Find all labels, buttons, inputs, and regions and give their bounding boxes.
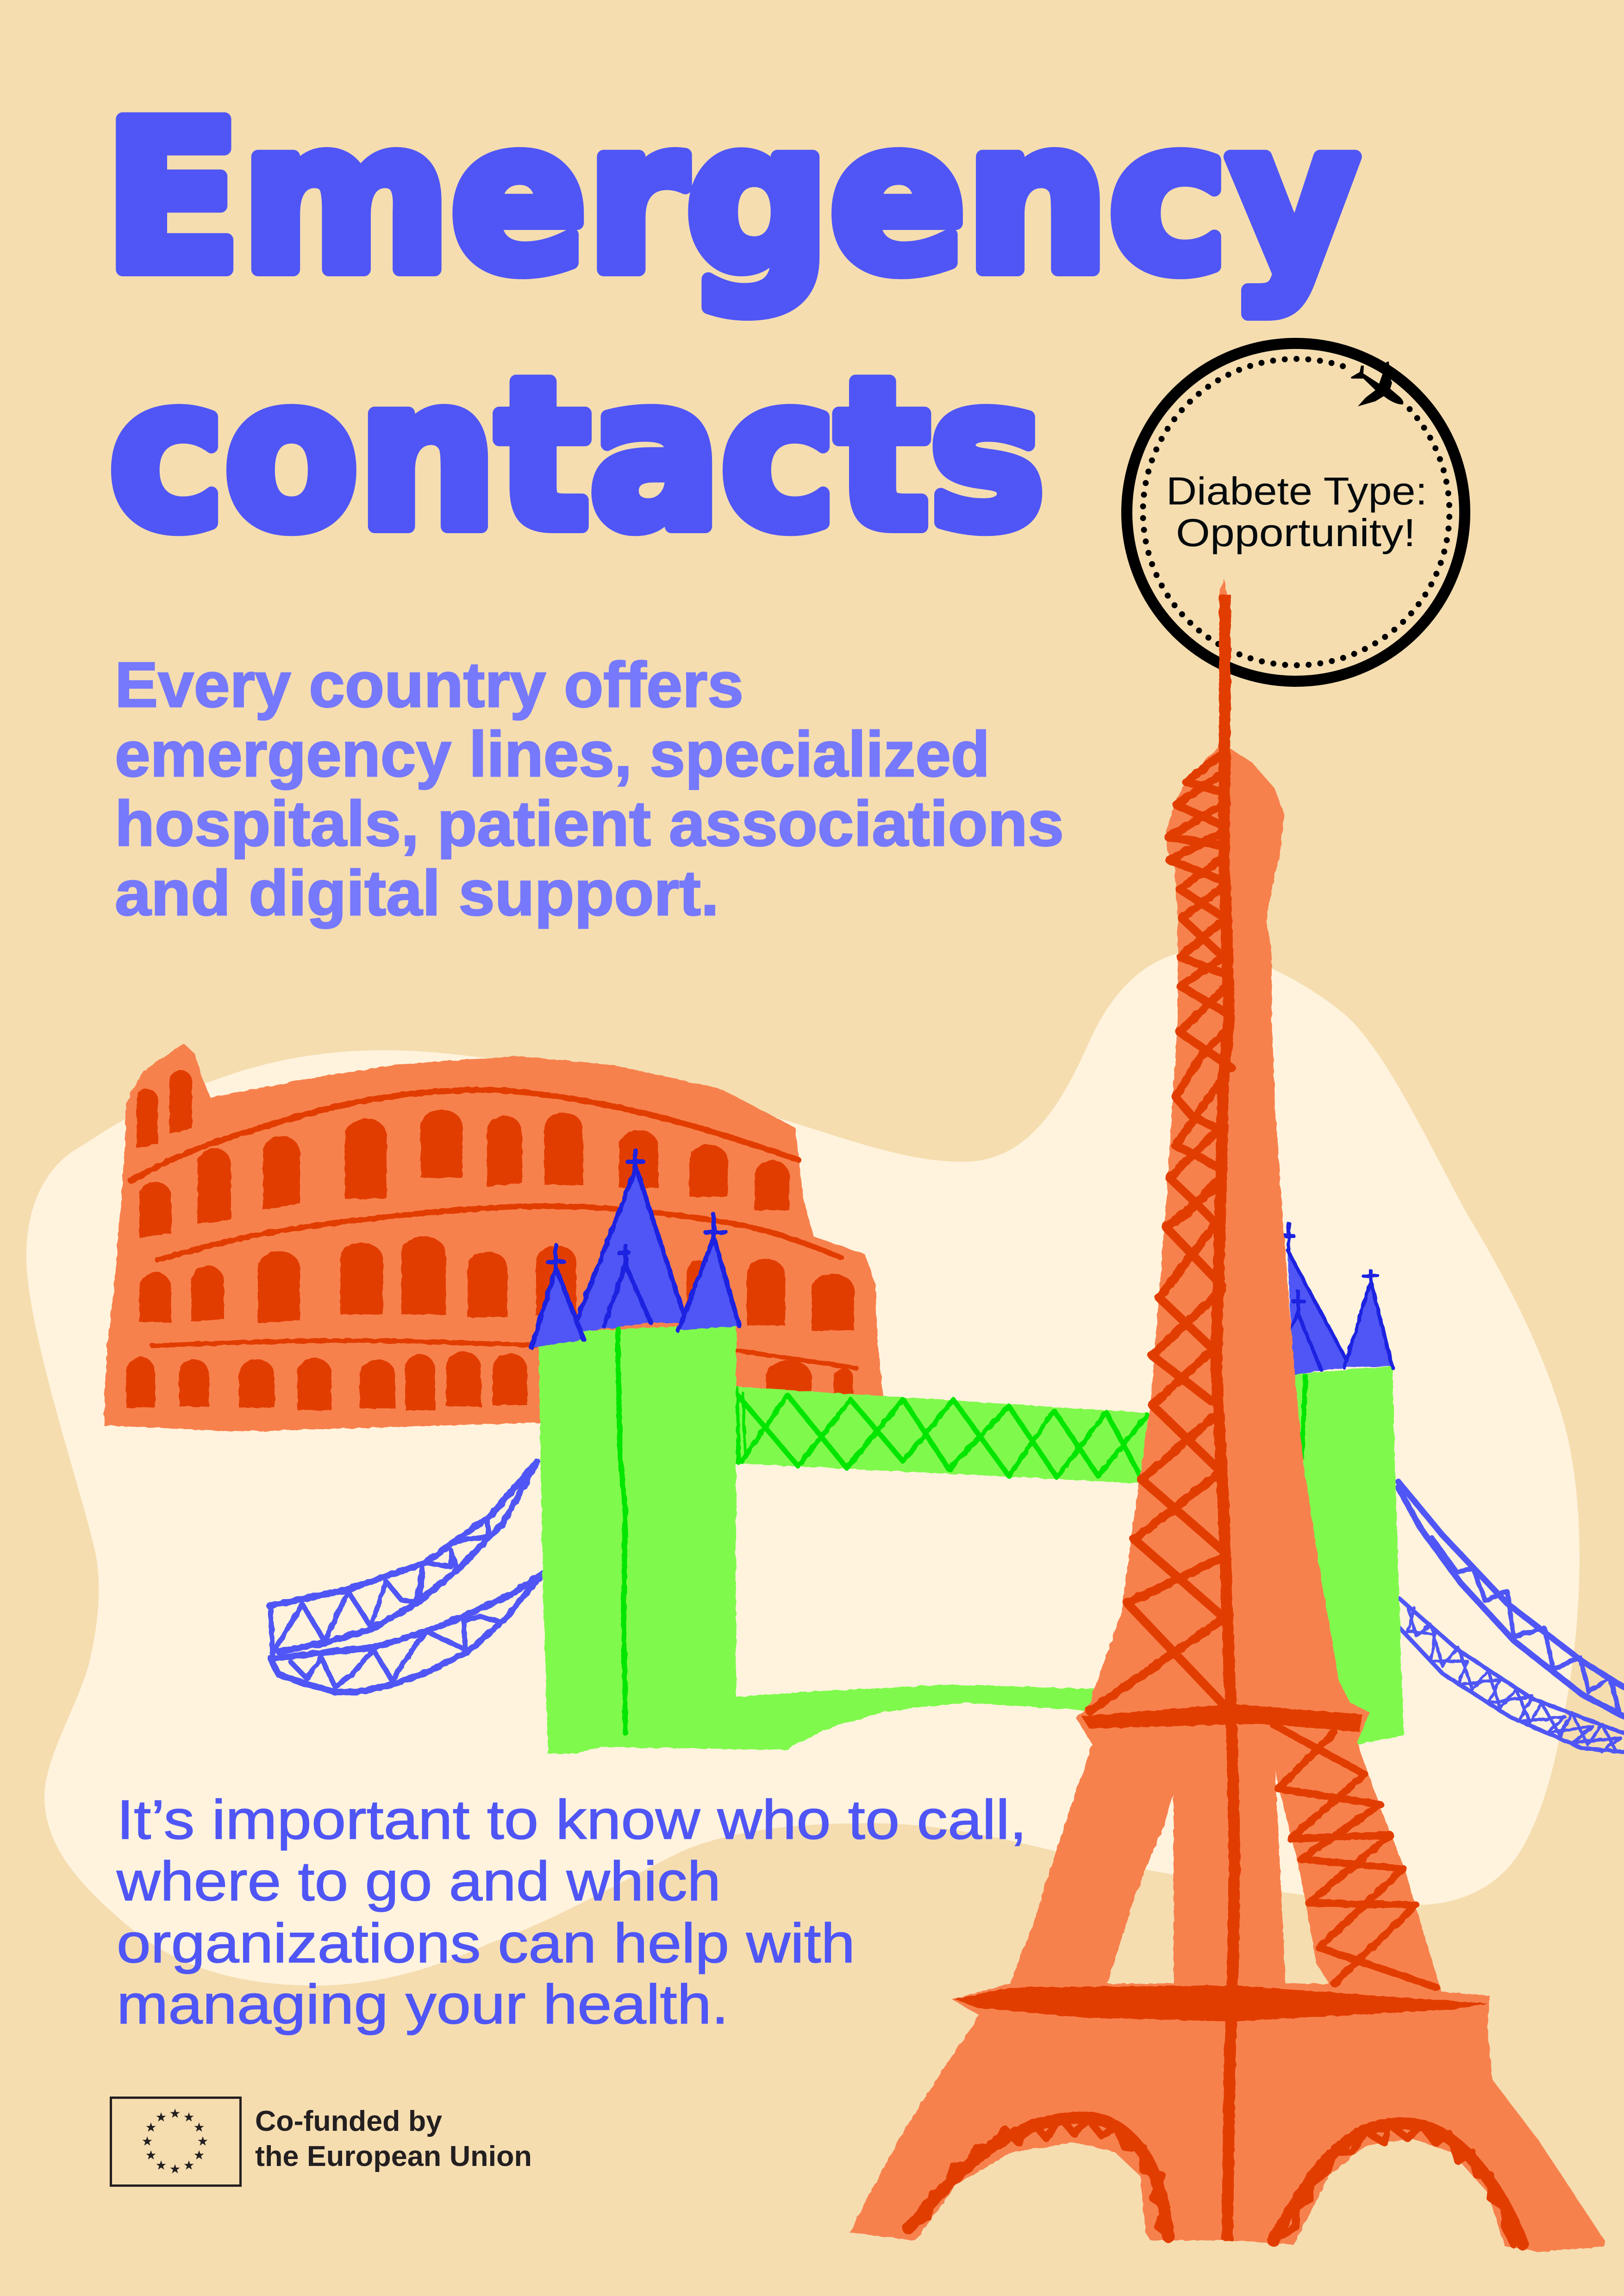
left tower green line [618, 1327, 625, 1733]
body text block: It’s important to know who to call, [117, 1789, 1027, 1851]
subtitle text block: Every country offers [115, 649, 743, 721]
left base arch [908, 2117, 1169, 2237]
badge text [1166, 469, 1427, 554]
tower silhouette [849, 579, 1605, 2252]
left tower roofs [531, 1150, 739, 1348]
body text block: where to go and which [116, 1850, 721, 1912]
inner spire [604, 1265, 651, 1326]
co-funded text [255, 2105, 532, 2172]
crosses [548, 1150, 725, 1269]
main spire [576, 1168, 687, 1332]
left small spire [531, 1268, 584, 1348]
central mast line [1216, 595, 1235, 2240]
EU co-funding logo [111, 2097, 532, 2185]
colosseum windows [126, 1070, 854, 1410]
first platform [1081, 1704, 1362, 1732]
EU flag frame [111, 2097, 241, 2185]
right bascule [1398, 1481, 1624, 1752]
badge text: Diabete Type: [1166, 469, 1427, 513]
illustration: Colosseum [104, 1043, 883, 1431]
right tower roofs [1284, 1223, 1393, 1375]
subtitle text block: hospitals, patient associations [115, 788, 1064, 859]
title: contacts [109, 335, 1045, 575]
co-funded text: the European Union [255, 2140, 532, 2172]
icon: airplane [1351, 361, 1403, 406]
illustration: Tower Bridge [269, 1150, 1624, 1754]
walkway [735, 1387, 1149, 1483]
cream blob backdrop [26, 950, 1580, 1985]
EU stars [143, 2109, 207, 2173]
co-funded text: Co-funded by [255, 2105, 443, 2137]
body text block [116, 1789, 1027, 2035]
walkway lattice [735, 1388, 1147, 1477]
left bascule [269, 1462, 543, 1692]
title: Emergency [104, 78, 1359, 318]
body text block: organizations can help with [117, 1912, 855, 1974]
left tower and road deck [538, 1324, 1105, 1754]
right small spire [678, 1237, 739, 1331]
subtitle text block [115, 649, 1064, 929]
right tower green line [1302, 1374, 1305, 1459]
right leg lattice [1273, 1724, 1436, 1987]
body text block: managing your health. [117, 1973, 729, 2035]
mid lattice [1090, 1182, 1222, 1711]
subtitle text block: and digital support. [115, 858, 719, 929]
colosseum band lines [131, 1090, 856, 1368]
badge ring [1127, 343, 1465, 681]
upper lattice [1166, 756, 1231, 1227]
badge: Diabete Type: Opportunity! [1127, 343, 1465, 681]
right base arch [1273, 2123, 1523, 2245]
second platform [954, 1985, 1487, 2022]
right tower body [1287, 1366, 1404, 1744]
colosseum body [104, 1043, 883, 1431]
dotted flight path [1143, 359, 1449, 665]
badge text: Opportunity! [1176, 511, 1416, 554]
subtitle text block: emergency lines, specialized [115, 719, 990, 790]
title [104, 78, 1359, 575]
illustration: Eiffel Tower [849, 579, 1605, 2252]
